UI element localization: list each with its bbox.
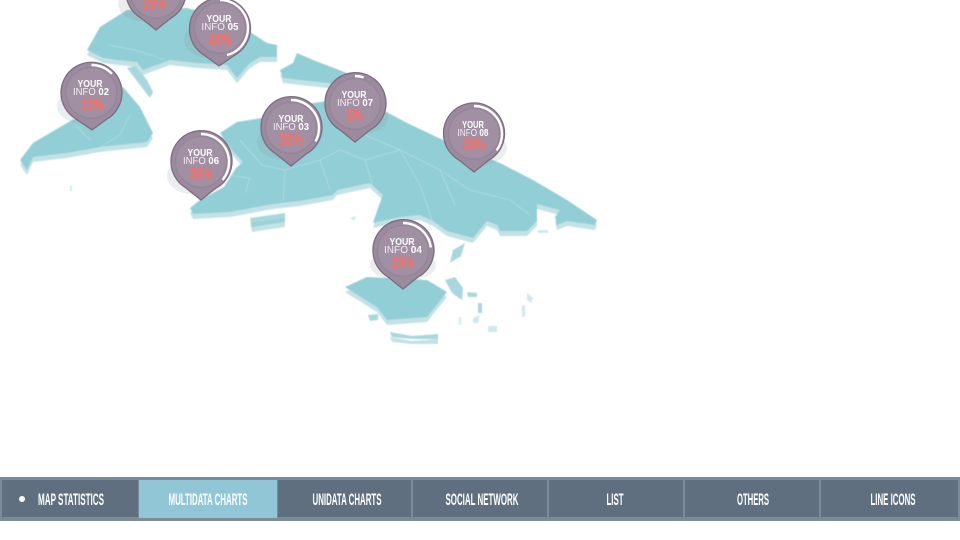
map pin 05 (184, 0, 250, 66)
map pin 01 (118, 0, 186, 30)
map borders (75, 45, 530, 223)
tab: map statistics (2, 480, 138, 517)
tab: others: OTHERS (737, 491, 769, 509)
label: YOUR (206, 14, 232, 25)
continent: eurasia and africa (190, 100, 597, 238)
map pin 06 (167, 131, 232, 200)
map depth layer (20, 13, 597, 344)
value: 23% (392, 253, 414, 272)
map pin 02: INFO 02 (73, 87, 109, 98)
value: 5% (347, 106, 363, 125)
landmass: upper strip (280, 53, 347, 85)
value: 35% (462, 135, 486, 154)
label: YOUR (462, 120, 485, 131)
map landmass (20, 8, 597, 339)
tab: multidata charts (139, 480, 277, 518)
label: YOUR (278, 114, 304, 125)
map pin 07 (325, 73, 388, 142)
map pin 08 (443, 103, 507, 172)
value: 13% (80, 95, 104, 114)
map pin 02 (57, 62, 122, 130)
map pin 04 (370, 220, 436, 289)
map pin 08: INFO 08 (458, 128, 489, 139)
map pin 03: INFO 03 (273, 122, 309, 133)
tab: line icons (821, 480, 958, 517)
tab: list: LIST (606, 491, 624, 509)
tab: unidata charts (278, 480, 411, 517)
navigation bar (0, 477, 960, 521)
map pin 03 (257, 97, 322, 166)
label: YOUR (188, 148, 213, 159)
world map (20, 8, 597, 344)
tab: others (685, 480, 819, 517)
continent: south america (20, 87, 153, 170)
tab: social network: SOCIAL NETWORK (446, 491, 519, 509)
tab: unidata charts: UNIDATA CHARTS (312, 491, 382, 509)
islands (127, 66, 482, 339)
value: 33% (279, 130, 303, 149)
map pin 07: INFO 07 (337, 98, 373, 109)
value: 36% (190, 164, 212, 183)
label: YOUR (342, 90, 367, 101)
map pin 06: INFO 06 (183, 156, 219, 167)
tab: map statistics: MAP STATISTICS (38, 491, 104, 509)
active bullet (19, 496, 25, 502)
value: 46% (208, 30, 232, 49)
tab: social network (413, 480, 547, 517)
continent: australia (345, 277, 447, 320)
map pin 05: INFO 05 (202, 22, 239, 33)
label: YOUR (78, 79, 103, 90)
label: YOUR (390, 237, 415, 248)
tab: multidata charts: MULTIDATA CHARTS (168, 491, 248, 509)
tab: list (549, 480, 683, 517)
map pin 04: INFO 04 (384, 245, 422, 256)
continent: north america (87, 8, 277, 78)
